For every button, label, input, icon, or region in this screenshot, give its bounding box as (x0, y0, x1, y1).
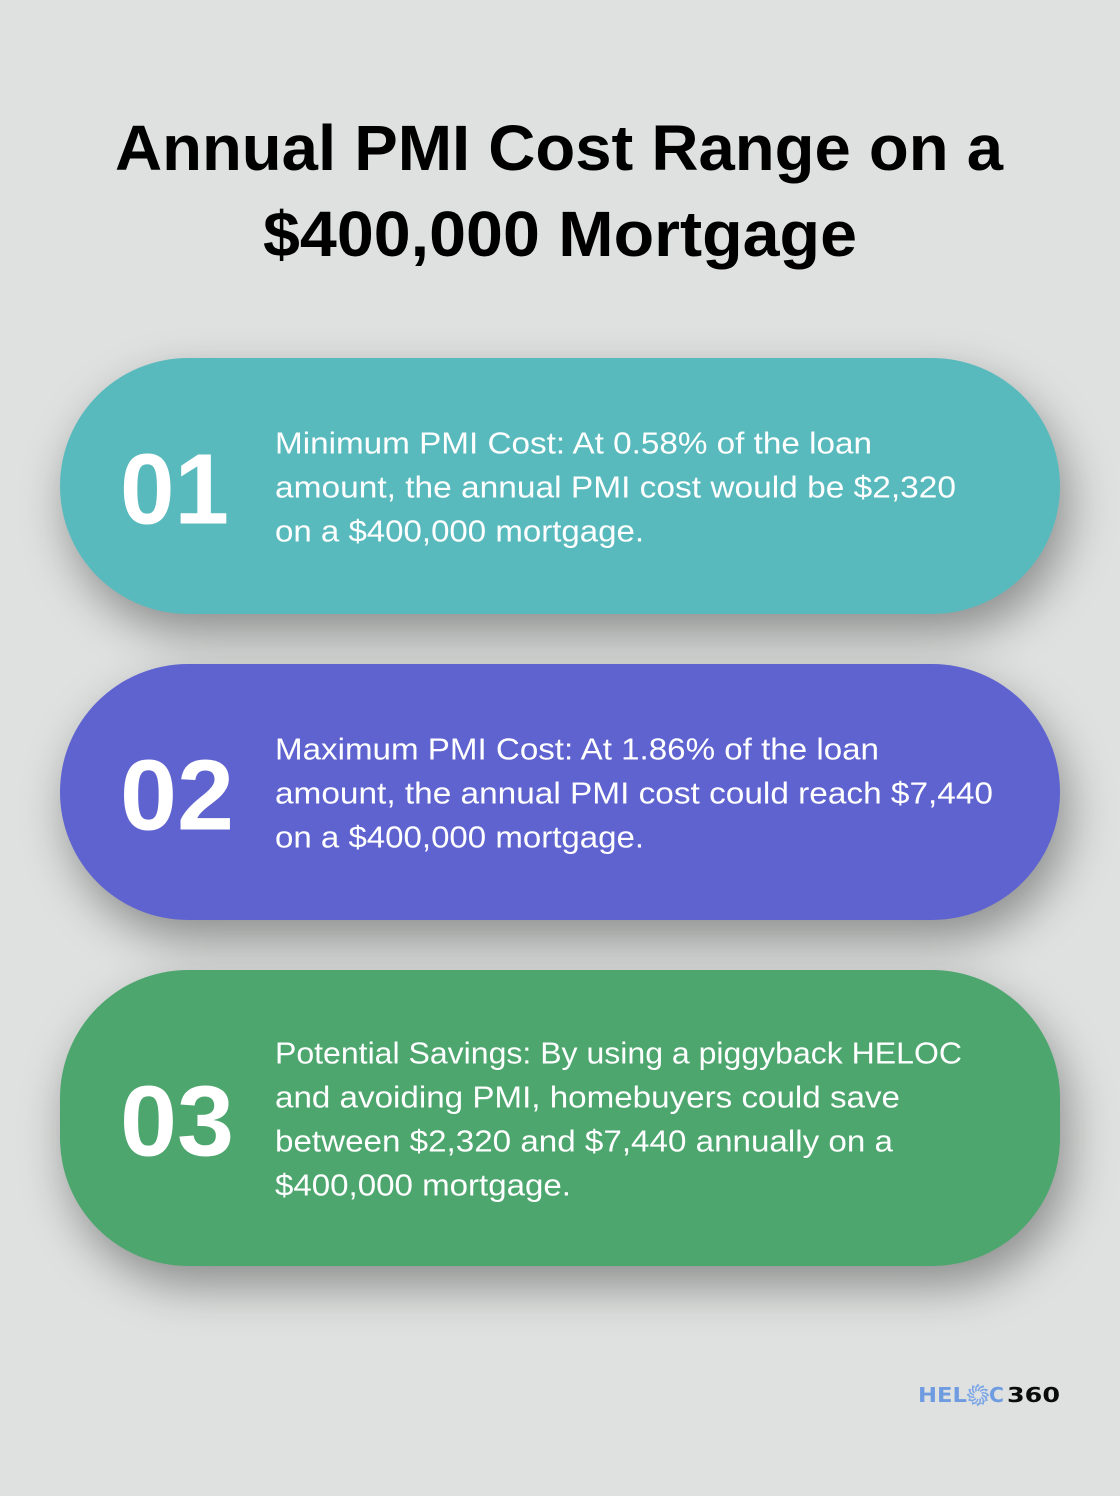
text: potential savings: and avoiding PMI, homebuyers could save (275, 1080, 900, 1114)
panel: potential savings (60, 970, 1060, 1266)
icon: swirl O (967, 1384, 989, 1406)
text: maximum PMI cost: Maximum PMI Cost: At 1.86% of the loan (275, 732, 879, 766)
logo: HELOC360: 360 (1007, 1383, 1060, 1407)
text: maximum PMI cost: amount, the annual PMI cost could reach $7,440 (275, 776, 993, 810)
number 02: 02 (120, 740, 234, 852)
text: potential savings (275, 1036, 962, 1202)
logo: HELOC360: HEL (918, 1383, 967, 1407)
text: maximum PMI cost: on a $400,000 mortgage. (275, 820, 644, 854)
text: minimum PMI cost: on a $400,000 mortgage. (275, 514, 644, 548)
text: minimum PMI cost: amount, the annual PMI cost would be $2,320 (275, 470, 956, 504)
title (115, 112, 1004, 270)
text: potential savings: between $2,320 and $7,440 annually on a (275, 1124, 894, 1158)
number 03: 03 (120, 1066, 234, 1178)
text: minimum PMI cost (275, 426, 956, 548)
panel: minimum PMI cost (60, 358, 1060, 614)
logo: HELOC360 (918, 1383, 1060, 1407)
title: Annual PMI Cost Range on a (115, 112, 1003, 184)
text: minimum PMI cost: Minimum PMI Cost: At 0.58% of the loan (275, 426, 872, 460)
panel: maximum PMI cost (60, 664, 1060, 920)
text: potential savings: Potential Savings: By using a piggyback HELOC (275, 1036, 962, 1070)
text: potential savings: $400,000 mortgage. (275, 1168, 571, 1202)
logo: HELOC360: C (989, 1383, 1004, 1407)
number 01: 01 (120, 434, 229, 546)
text: maximum PMI cost (275, 732, 993, 854)
title: $400,000 Mortgage (263, 198, 857, 270)
